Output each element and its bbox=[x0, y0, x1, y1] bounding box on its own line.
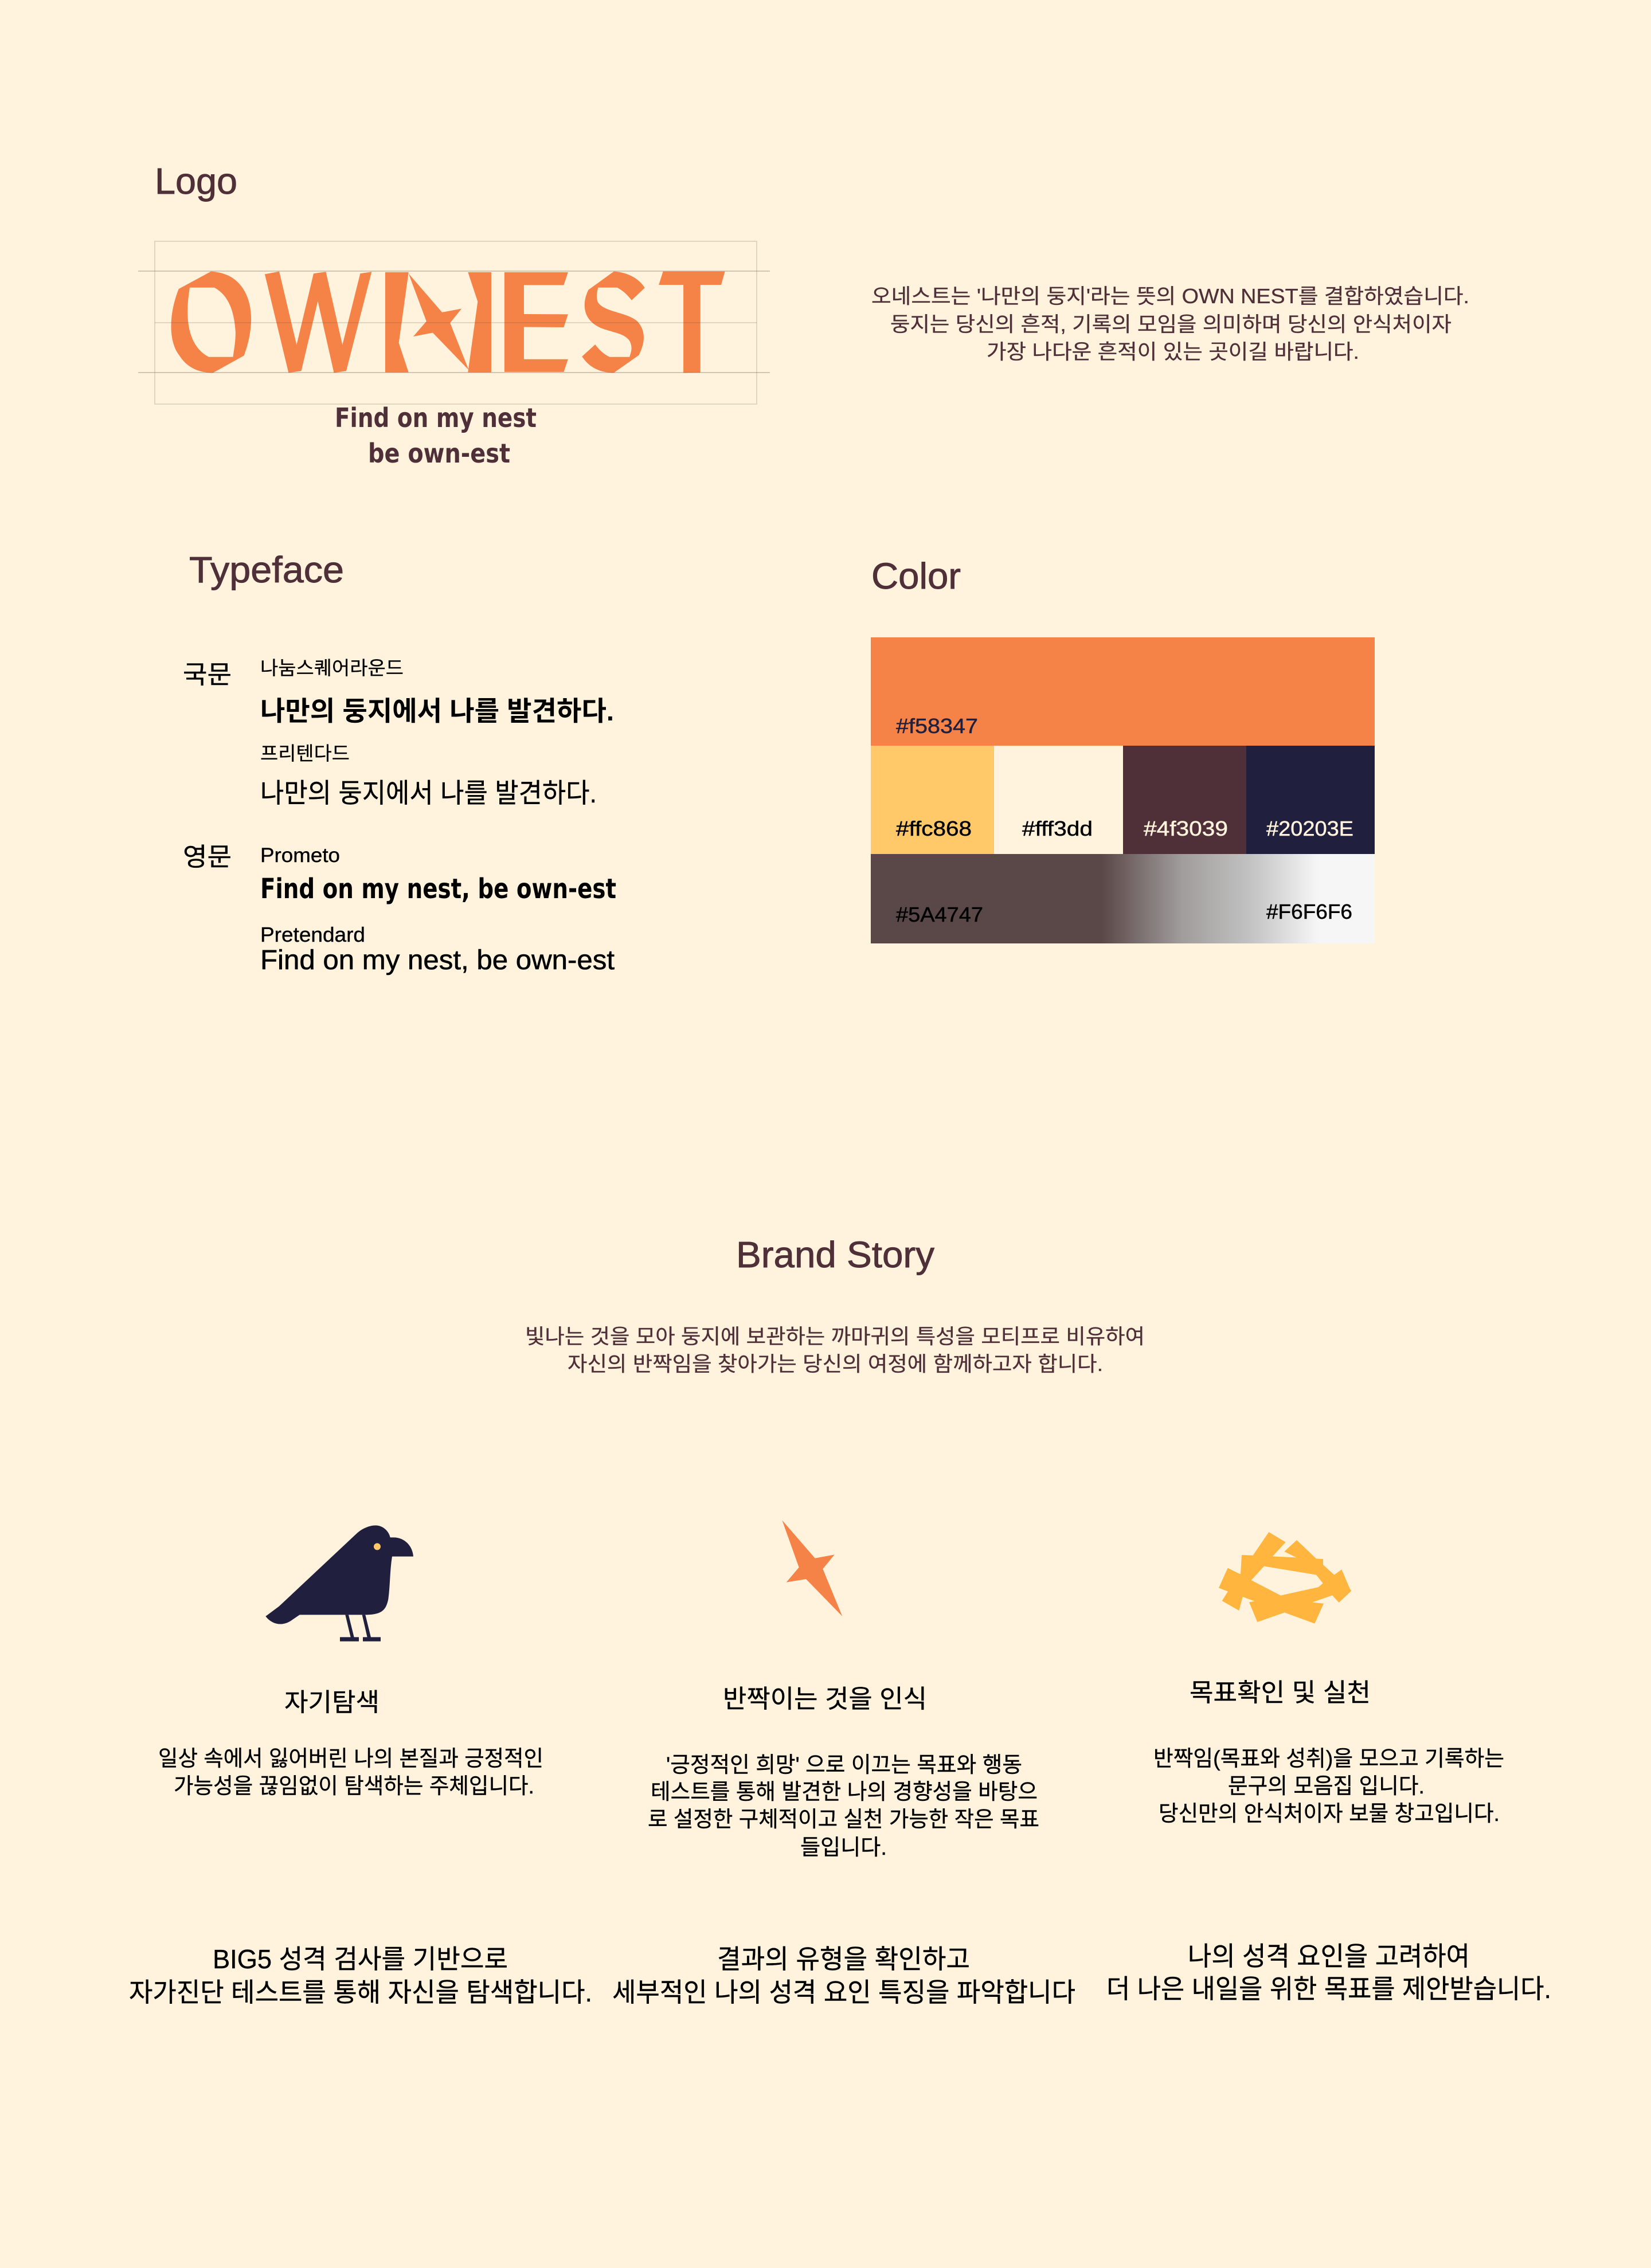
panel: typeface samples bbox=[183, 657, 616, 976]
text block: logo description: 오네스트는 '나만의 둥지'라는 뜻의 OWN NEST를 결합하였습니다. bbox=[871, 284, 1469, 308]
swatch: grey gradient bbox=[871, 854, 1375, 943]
text block: brand story description bbox=[525, 1325, 1145, 1376]
swatch: yellow bbox=[871, 746, 994, 854]
swatch: brown: #4f3039 bbox=[1144, 817, 1228, 840]
column 3: goal check and practice bbox=[1153, 1679, 1504, 1826]
bold Korean sample: 나만의 둥지에서 나를 발견하다. bbox=[260, 696, 614, 726]
swatch: grey gradient: #F6F6F6 bbox=[1266, 900, 1352, 923]
column 1 title: 자기탐색 bbox=[284, 1689, 380, 1717]
caption 1 bbox=[129, 1944, 592, 2007]
column 2 description: 로 설정한 구체적이고 실천 가능한 작은 목표 bbox=[648, 1808, 1039, 1832]
caption 3: 더 나은 내일을 위한 목표를 제안받습니다. bbox=[1106, 1974, 1551, 2004]
logo wordmark: OWNEST bbox=[171, 272, 725, 373]
regular Korean sample: 나만의 둥지에서 나를 발견하다. bbox=[260, 778, 597, 808]
font name: NanumSquare Round: 나눔스퀘어라운드 bbox=[260, 657, 404, 679]
heading: Typeface: Typeface bbox=[189, 549, 344, 590]
swatch: brown bbox=[1123, 746, 1246, 854]
column 3 description: 반짝임(목표와 성취)을 모으고 기록하는 bbox=[1153, 1747, 1504, 1771]
label: Korean fonts: 국문 bbox=[183, 661, 232, 689]
font name: Pretendard Korean: 프리텐다드 bbox=[260, 743, 350, 764]
column 1: self exploration bbox=[158, 1689, 543, 1799]
text block: brand story description: 자신의 반짝임을 찾아가는 당신의 여정에 함께하고자 합니다. bbox=[568, 1352, 1103, 1376]
column 3 title: 목표확인 및 실천 bbox=[1190, 1679, 1371, 1707]
column 2 description: '긍정적인 희망' 으로 이끄는 목표와 행동 bbox=[666, 1753, 1022, 1777]
caption 2: 세부적인 나의 성격 요인 특징을 파악합니다 bbox=[612, 1977, 1075, 2007]
icon: crow bbox=[265, 1525, 413, 1642]
heading: Color: Color bbox=[871, 555, 961, 597]
column 3 description: 당신만의 안식처이자 보물 창고입니다. bbox=[1159, 1802, 1500, 1826]
column 1 description bbox=[158, 1747, 543, 1799]
column 2: recognising what shines bbox=[648, 1685, 1039, 1860]
bold English sample: Find on my nest, be own-est bbox=[260, 873, 616, 905]
column 2 description: 들입니다. bbox=[800, 1836, 887, 1860]
text block: logo description: 가장 나다운 흔적이 있는 곳이길 바랍니다. bbox=[987, 340, 1359, 363]
icon: nest bbox=[1219, 1532, 1351, 1624]
column 3 description: 문구의 모음집 입니다. bbox=[1228, 1775, 1425, 1799]
swatch: navy bbox=[1246, 746, 1375, 854]
logo tagline: be own-est bbox=[368, 438, 510, 469]
caption 2: 결과의 유형을 확인하고 bbox=[717, 1944, 970, 1974]
swatch: yellow: #ffc868 bbox=[896, 817, 972, 840]
label: English fonts: 영문 bbox=[183, 843, 232, 871]
column 2 description bbox=[648, 1753, 1039, 1860]
column 1 description: 가능성을 끊임없이 탐색하는 주체입니다. bbox=[174, 1775, 534, 1799]
logo guide lines bbox=[138, 241, 770, 404]
swatch: orange: #f58347 bbox=[896, 714, 978, 738]
logo tagline bbox=[335, 402, 537, 469]
caption 3: 나의 성격 요인을 고려하여 bbox=[1188, 1941, 1470, 1971]
swatch: cream bbox=[994, 746, 1123, 854]
panel: logo with construction guides bbox=[138, 241, 770, 404]
text block: logo description bbox=[871, 284, 1469, 363]
column 3 description bbox=[1153, 1747, 1504, 1826]
text block: brand story description: 빛나는 것을 모아 둥지에 보관하는 까마귀의 특성을 모티프로 비유하여 bbox=[525, 1325, 1145, 1348]
icon: sparkle star bbox=[782, 1520, 842, 1616]
caption 3 bbox=[1106, 1941, 1551, 2004]
caption 2 bbox=[612, 1944, 1075, 2007]
swatch: navy: #20203E bbox=[1266, 817, 1353, 840]
font name: Prometo: Prometo bbox=[260, 844, 340, 867]
regular English sample: Find on my nest, be own-est bbox=[260, 945, 615, 976]
column 2 description: 테스트를 통해 발견한 나의 경향성을 바탕으 bbox=[651, 1780, 1038, 1804]
panel: colour palette bbox=[871, 637, 1375, 943]
swatch: grey gradient: #5A4747 bbox=[896, 903, 983, 926]
column 1 description: 일상 속에서 잃어버린 나의 본질과 긍정적인 bbox=[158, 1747, 543, 1771]
heading: Logo: Logo bbox=[155, 160, 237, 202]
swatch: orange bbox=[871, 637, 1375, 746]
swatch: cream: #fff3dd bbox=[1022, 817, 1093, 840]
font name: Pretendard English: Pretendard bbox=[260, 923, 365, 946]
caption 1: BIG5 성격 검사를 기반으로 bbox=[213, 1944, 508, 1974]
logo tagline: Find on my nest bbox=[335, 402, 537, 433]
heading: Brand Story: Brand Story bbox=[736, 1234, 934, 1275]
caption 1: 자가진단 테스트를 통해 자신을 탐색합니다. bbox=[129, 1977, 592, 2007]
column 2 title: 반짝이는 것을 인식 bbox=[723, 1685, 927, 1713]
text block: logo description: 둥지는 당신의 흔적, 기록의 모임을 의미하며 당신의 안식처이자 bbox=[890, 312, 1452, 336]
